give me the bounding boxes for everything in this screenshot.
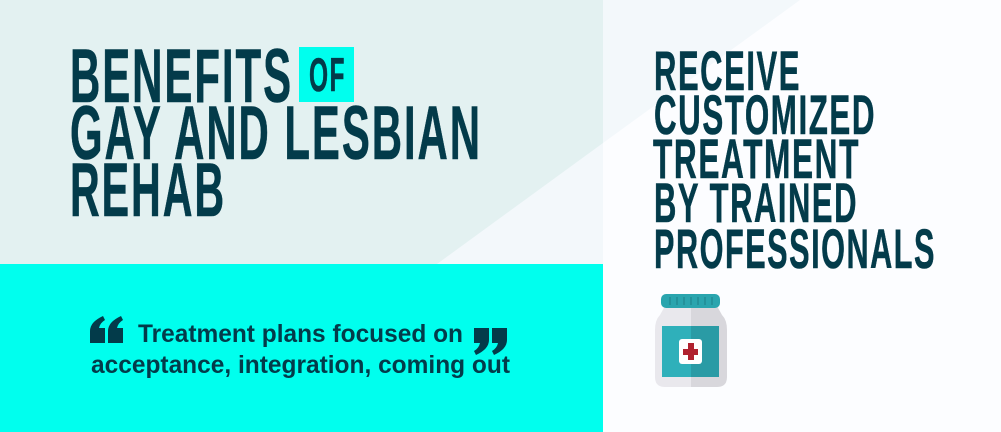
icon: opening quote mark — [90, 316, 123, 343]
quote text: acceptance, integration, coming out — [91, 351, 511, 379]
title: GAY AND LESBIAN — [70, 91, 482, 176]
highlight: of — [299, 47, 354, 102]
icon: closing quote mark — [474, 328, 507, 355]
panel: right background — [603, 0, 1001, 432]
quote text — [91, 320, 511, 379]
title: REHAB — [70, 148, 226, 233]
title: BENEFITS — [70, 34, 293, 119]
icon: medicine bottle — [655, 294, 727, 387]
panel: title background — [0, 0, 603, 264]
panel: quote background — [0, 264, 603, 432]
heading: receive customized treatment — [653, 39, 936, 280]
quote — [90, 316, 511, 379]
heading: receive customized treatment: RECEIVE — [654, 39, 801, 102]
title — [70, 34, 482, 233]
highlight: of: OF — [309, 48, 346, 101]
quote text: Treatment plans focused on — [138, 320, 463, 348]
